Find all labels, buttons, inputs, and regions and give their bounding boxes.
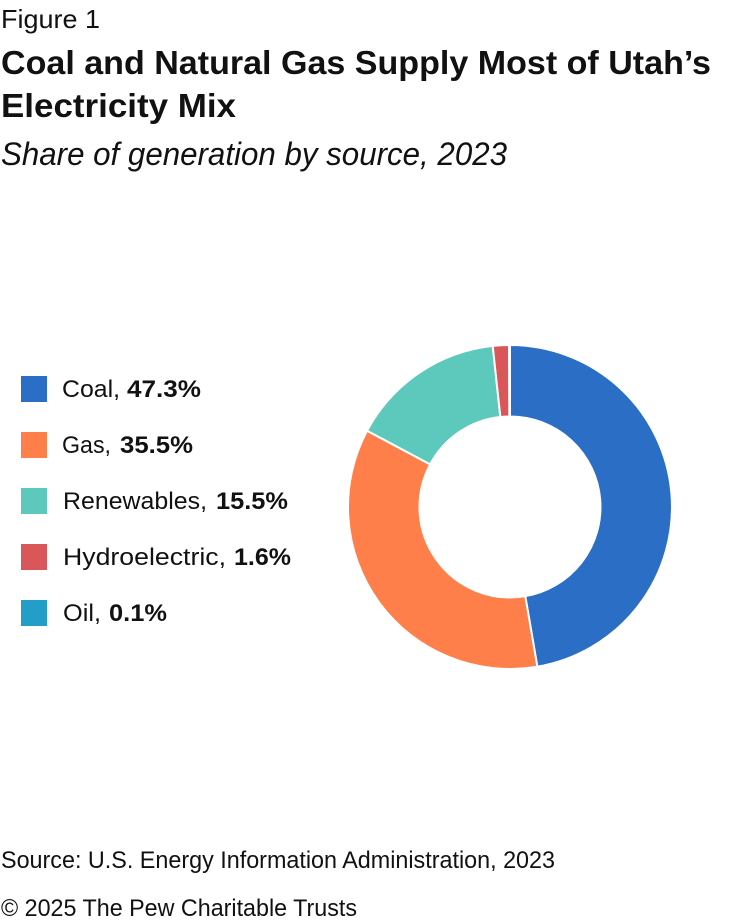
legend item: renewables — [21, 488, 288, 515]
title: Electricity Mix — [1, 87, 237, 124]
legend item: gas: 35.5% — [120, 432, 193, 459]
legend — [21, 376, 291, 627]
legend item: oil — [21, 600, 167, 627]
subtitle: Share of generation by source, 2023 — [1, 136, 507, 172]
segment: coal 47.3% — [510, 345, 672, 667]
legend item: renewables: 15.5% — [216, 488, 288, 515]
title — [1, 44, 711, 124]
legend item: coal — [21, 376, 201, 403]
figure label: Figure 1 — [1, 4, 100, 34]
legend item: oil: 0.1% — [109, 600, 167, 627]
title: Coal and Natural Gas Supply Most of Utah’s — [1, 44, 711, 81]
segment: oil 0.1% — [509, 345, 510, 416]
legend item: coal: 47.3% — [127, 376, 201, 403]
segment: renewables 15.5% — [367, 346, 500, 464]
donut chart — [348, 345, 672, 669]
legend item: hydroelectric: Hydroelectric, — [63, 544, 226, 571]
legend item: coal: Coal, — [62, 376, 120, 403]
source note: Source: U.S. Energy Information Administration, 2023 — [1, 847, 555, 874]
legend item: hydroelectric: 1.6% — [234, 544, 291, 571]
legend item: gas — [21, 432, 193, 459]
legend item: hydroelectric — [21, 544, 291, 571]
segment: gas 35.5% — [348, 431, 537, 669]
legend item: gas: Gas, — [62, 432, 111, 459]
legend item: renewables: Renewables, — [63, 488, 207, 515]
copyright: © 2025 The Pew Charitable Trusts — [1, 895, 357, 922]
legend item: oil: Oil, — [63, 600, 101, 627]
segment: hydroelectric 1.6% — [493, 345, 509, 417]
